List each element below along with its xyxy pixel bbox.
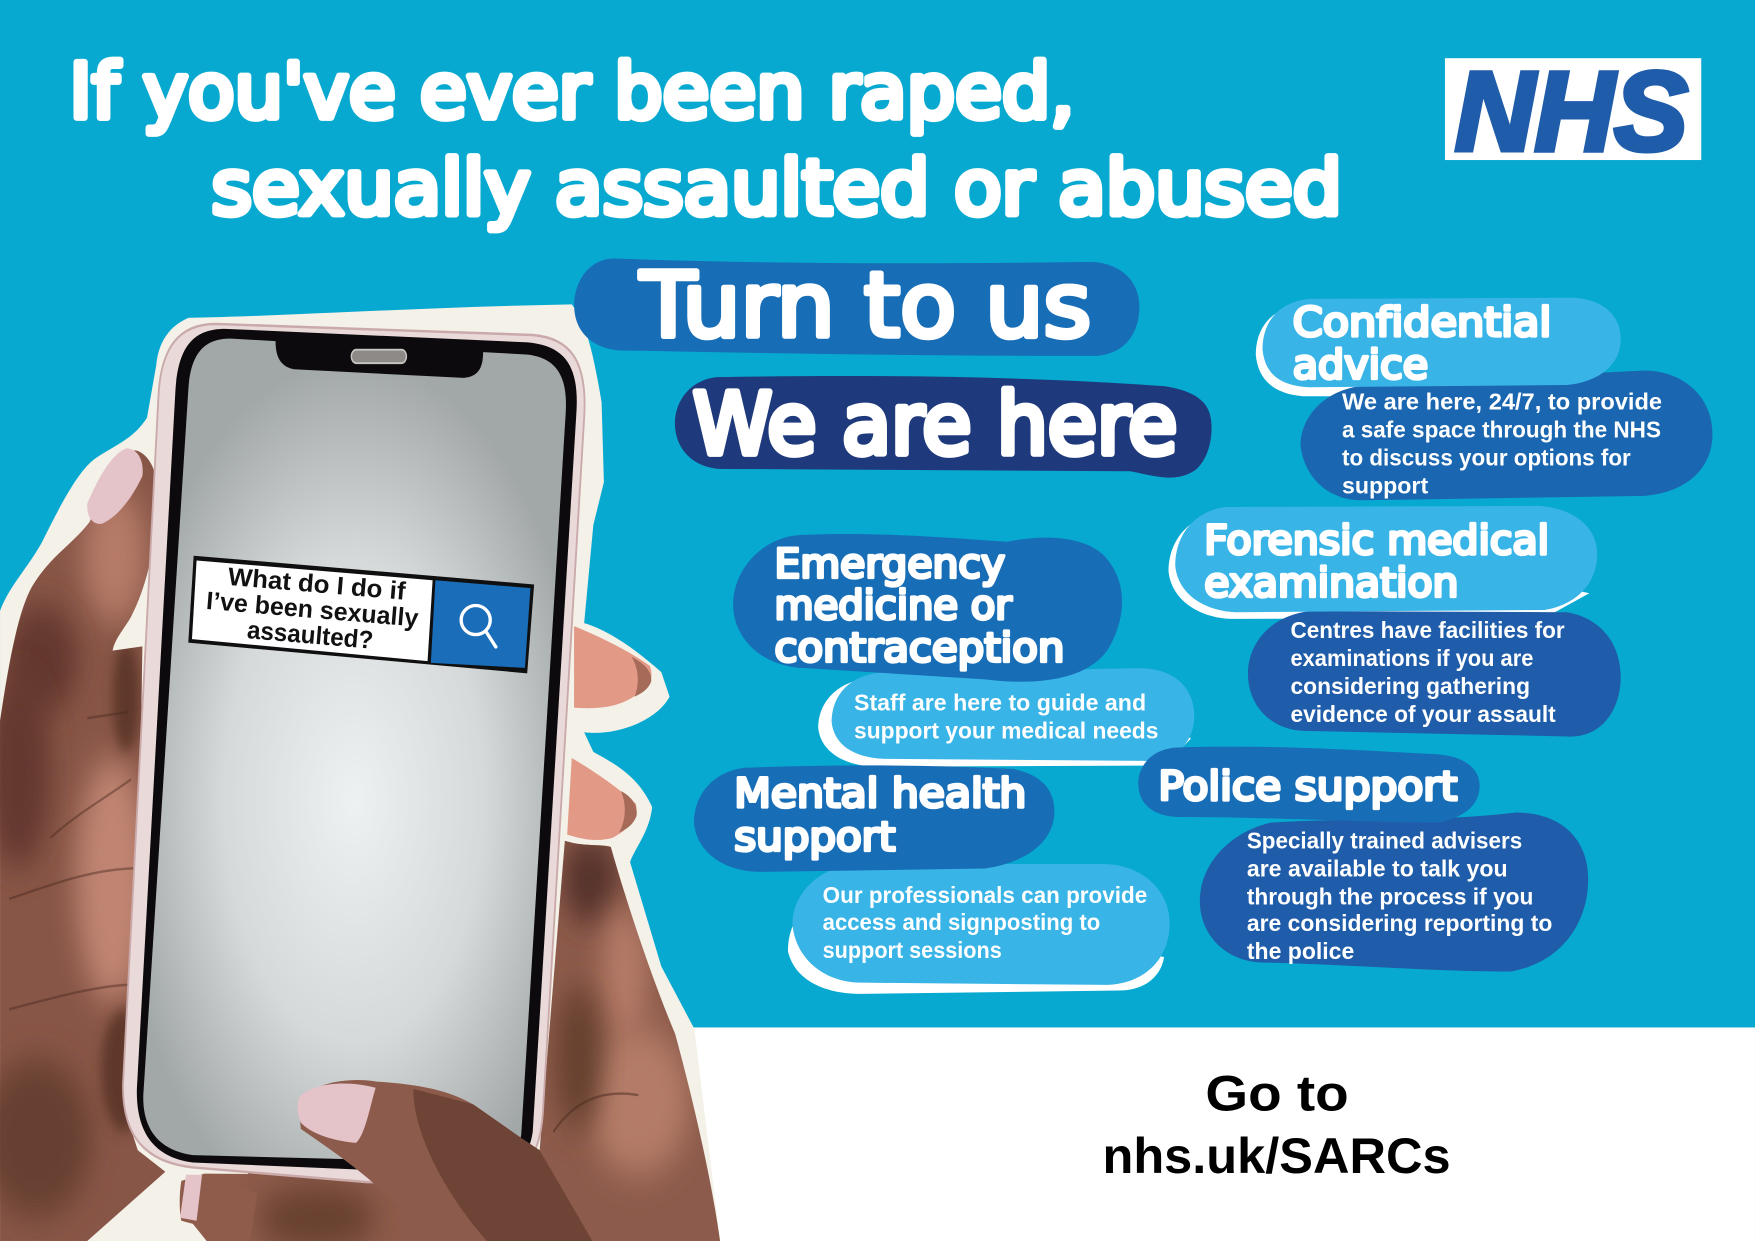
body pill xyxy=(788,895,1164,994)
right hand fingers xyxy=(567,626,652,840)
title: If you've ever been raped, xyxy=(69,47,1074,136)
panel: confidential advice: a safe space through the NHS xyxy=(1342,417,1661,443)
panel: forensic medical examination xyxy=(1168,506,1621,737)
phone bezel xyxy=(137,329,577,1175)
icon: thumb nail xyxy=(87,448,143,524)
heading pill xyxy=(733,534,1122,682)
heading pill: Turn to us: Turn to us xyxy=(639,254,1091,358)
body text: We are here, 24/7, to provide xyxy=(1342,389,1662,415)
panel: confidential advice: to discuss your options for xyxy=(1342,445,1631,471)
heading pill xyxy=(694,765,1054,872)
footer white panel xyxy=(672,1027,1755,1241)
icon: thumb nail xyxy=(298,1083,376,1143)
icon: magnifier xyxy=(461,606,496,647)
search text: assaulted? xyxy=(246,616,374,655)
panel: medical support: contraception xyxy=(775,624,1064,671)
body text: Specially trained advisers xyxy=(1247,827,1522,853)
title: sexually assaulted or abused xyxy=(212,143,1342,232)
body pill xyxy=(1248,611,1621,737)
search text xyxy=(203,561,422,658)
phone xyxy=(123,324,585,1182)
call to action: website: Go to xyxy=(1205,1064,1349,1121)
panel: mental health support: access and signposting to xyxy=(823,909,1100,935)
phone case xyxy=(123,324,585,1182)
panel: mental health support: support xyxy=(734,814,895,861)
panel: police support: Police support xyxy=(1158,763,1457,810)
panel: confidential advice: Confidential xyxy=(1293,299,1551,346)
panel: confidential advice: support xyxy=(1342,473,1428,499)
call to action: website xyxy=(1102,1064,1451,1184)
heading pill shadow xyxy=(1256,304,1455,396)
panel: medical support: medicine or xyxy=(775,582,1012,629)
panel: forensic medical examination: Forensic medical xyxy=(1204,517,1549,564)
panel: police support: are available to talk you xyxy=(1247,855,1508,881)
heading pill xyxy=(1263,298,1621,387)
left hand xyxy=(0,433,175,1241)
panel: police support: the police xyxy=(1247,938,1354,964)
panel: confidential advice xyxy=(1256,298,1712,500)
panel: mental health support xyxy=(694,765,1170,994)
body text: Centres have facilities for xyxy=(1290,617,1565,643)
body text: Staff are here to guide and xyxy=(854,690,1146,716)
heading pill: We are here: We are here xyxy=(693,375,1177,474)
call to action: website: nhs.uk/SARCs xyxy=(1102,1127,1451,1184)
search bar xyxy=(188,556,534,673)
search text: I’ve been sexually xyxy=(205,587,419,633)
thumb over phone xyxy=(298,1080,592,1241)
panel: police support: are considering reporting to xyxy=(1247,910,1552,936)
creases xyxy=(9,712,138,1009)
panel: mental health support: support sessions xyxy=(823,937,1002,963)
panel: mental health support: Mental health xyxy=(734,770,1026,817)
heading pill xyxy=(1175,506,1597,612)
body pill xyxy=(1301,370,1712,500)
panel: medical support: Emergency xyxy=(775,541,1005,588)
phone speaker xyxy=(351,350,406,363)
panel: medical support xyxy=(733,534,1194,767)
cut-out paper outline xyxy=(0,304,720,1241)
panel: forensic medical examination: examination xyxy=(1204,560,1458,607)
panel: forensic medical examination: considering gathering xyxy=(1290,673,1530,699)
panel: police support xyxy=(1138,747,1588,971)
body pill xyxy=(818,678,1191,767)
title xyxy=(69,47,1342,232)
panel: forensic medical examination: examinations if you are xyxy=(1290,645,1533,671)
panel: forensic medical examination: evidence of your assault xyxy=(1290,701,1556,727)
right hand palm and lower fingers xyxy=(180,832,721,1241)
phone screen xyxy=(143,339,566,1163)
heading pill xyxy=(1138,747,1480,823)
icon: NHS logo: NHS xyxy=(1455,49,1688,174)
panel: police support: through the process if you xyxy=(1247,883,1533,909)
panel: medical support: support your medical needs xyxy=(854,718,1158,744)
heading pill shadow xyxy=(1168,513,1589,619)
body pill xyxy=(1200,813,1588,971)
panel: confidential advice: advice xyxy=(1293,341,1428,388)
body text: Our professionals can provide xyxy=(823,882,1147,908)
hands holding phone illustration xyxy=(0,304,721,1241)
search text: What do I do if xyxy=(227,563,407,606)
